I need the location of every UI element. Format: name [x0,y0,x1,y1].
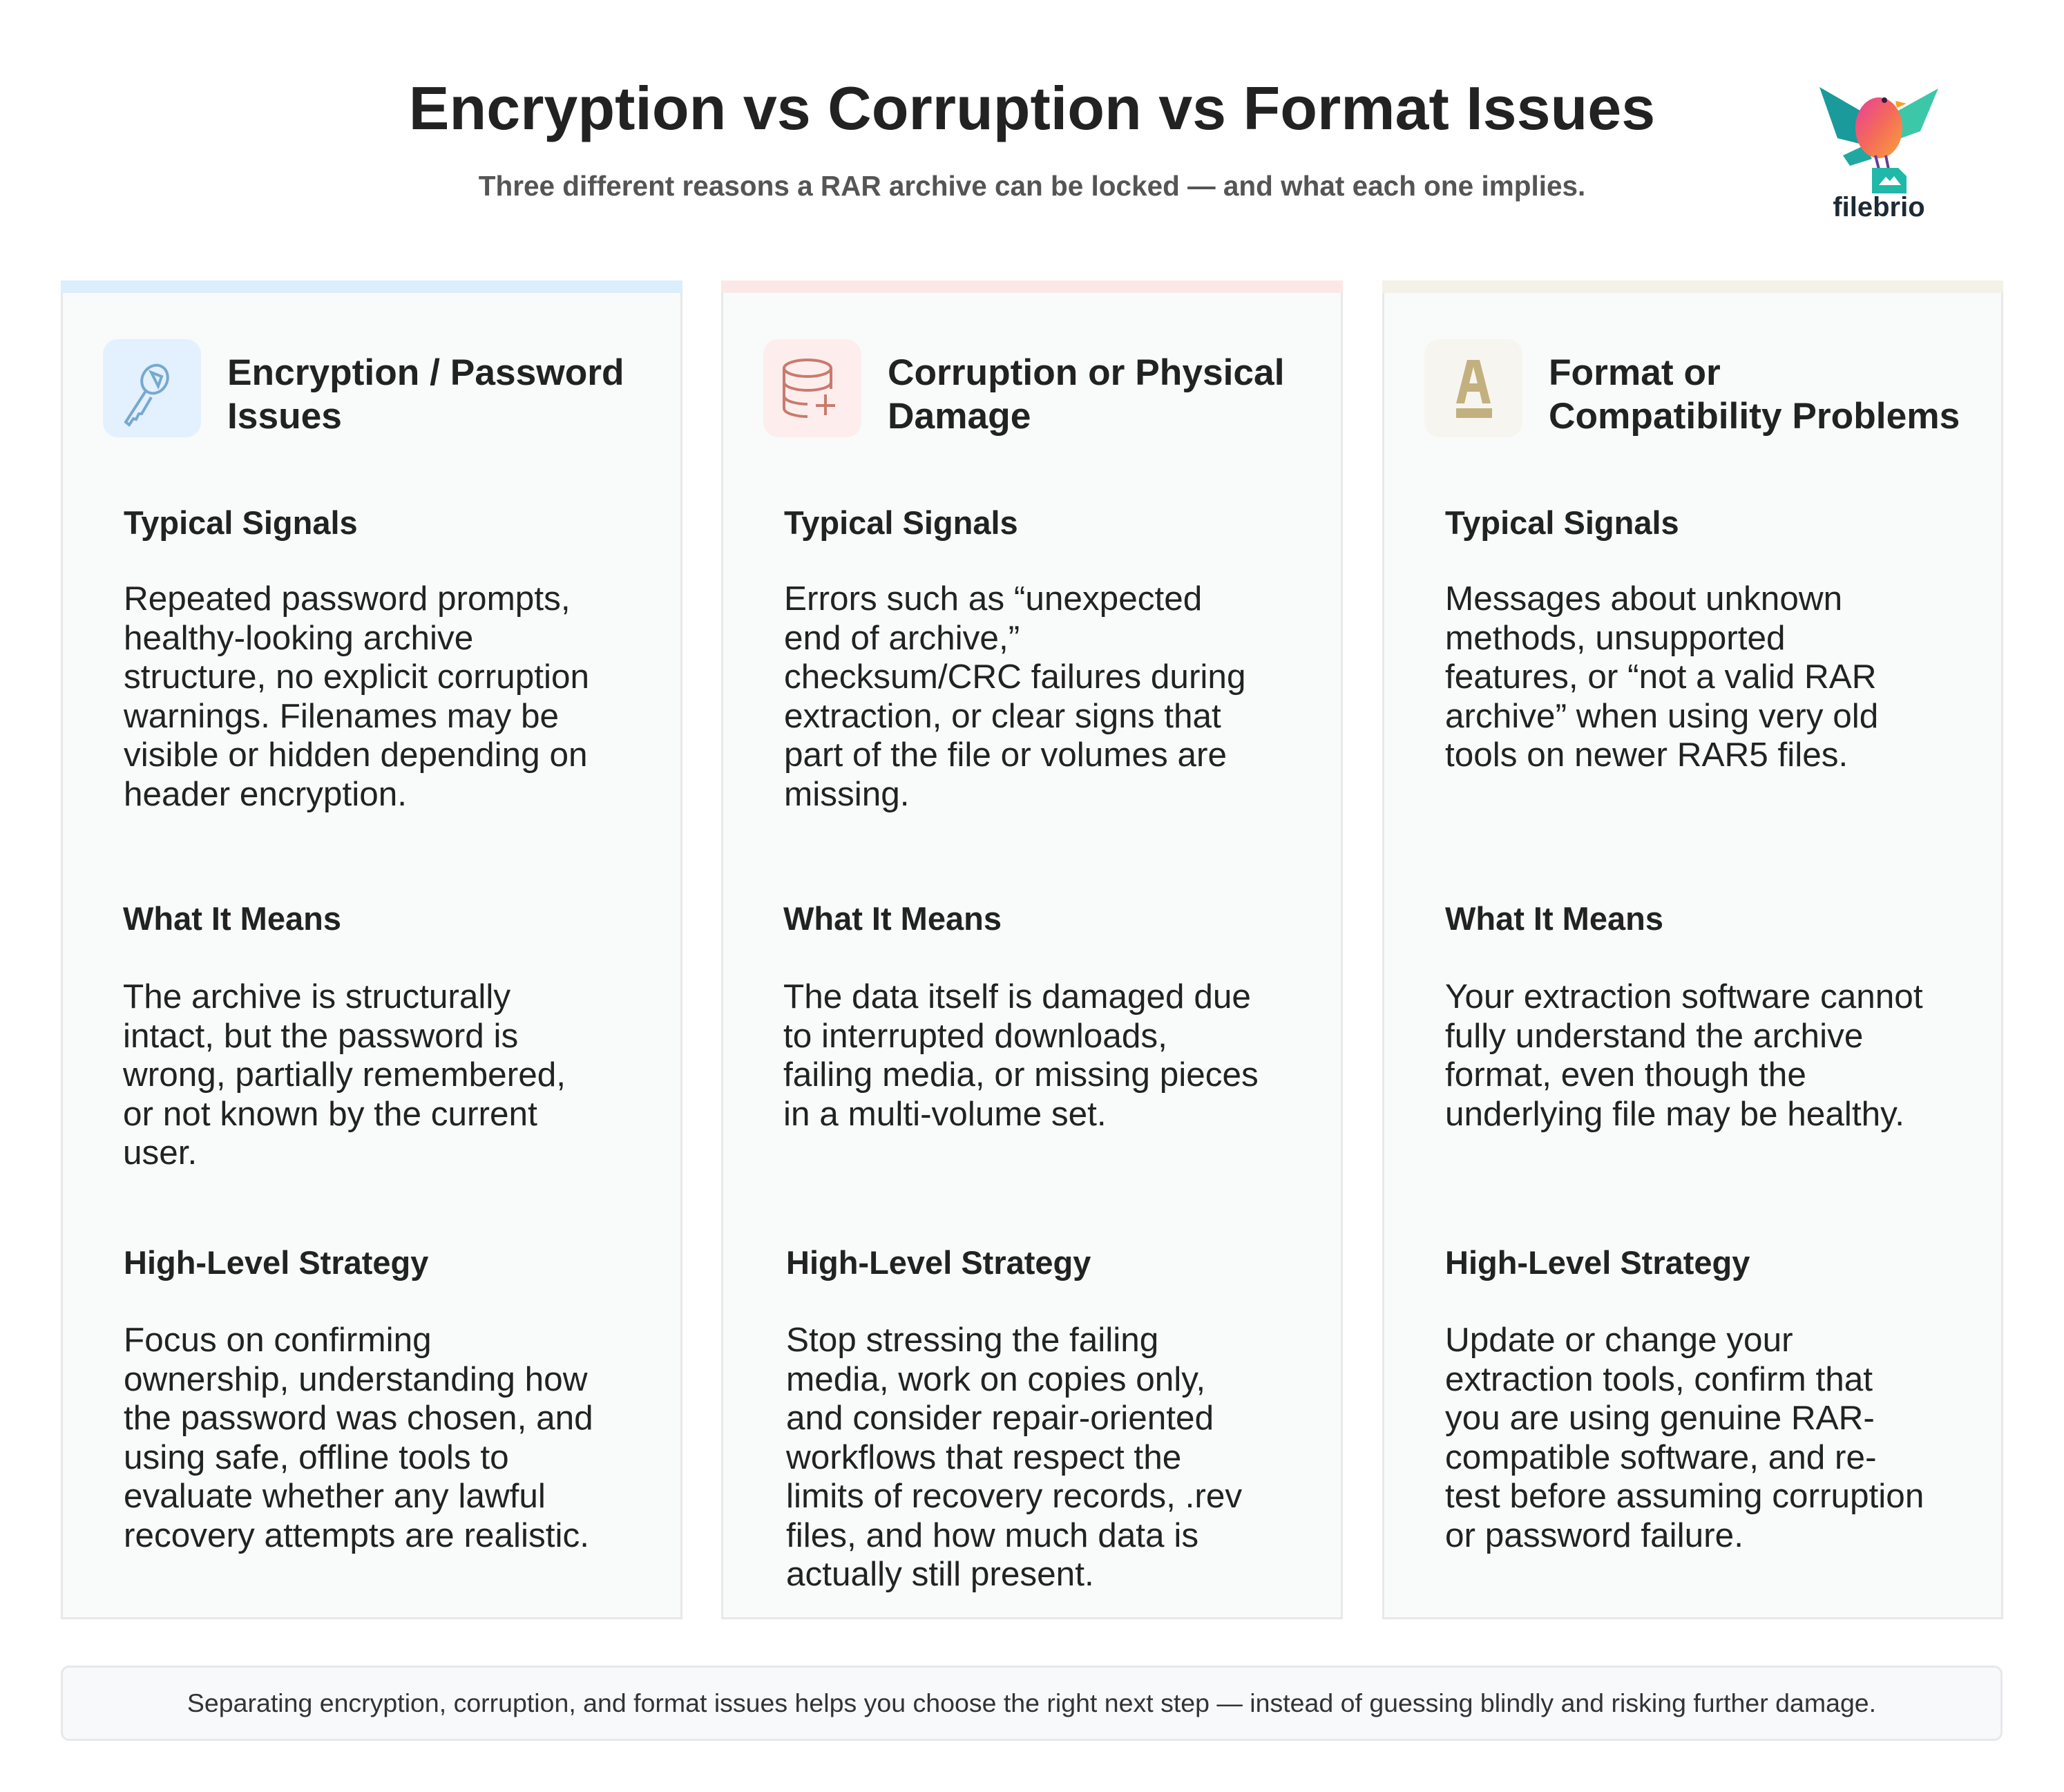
heading [1549,352,1960,437]
heading [888,352,1285,437]
text: The archive is structurally [123,978,510,1016]
subtitle: Three different reasons a RAR archive can be locked — and what each one implies. [479,170,1585,202]
text: compatible software, and re- [1445,1438,1877,1476]
text: workflows that respect the [786,1438,1181,1476]
footer note [61,1666,2003,1741]
text: intact, but the password is [123,1017,518,1054]
text: you are using genuine RAR- [1445,1399,1875,1437]
panel: format [1382,280,2003,1619]
text: healthy-looking archive [124,619,473,656]
text: Your extraction software cannot [1445,978,1923,1016]
text: recovery attempts are realistic. [124,1516,589,1554]
text: failing media, or missing pieces [783,1056,1259,1094]
text [124,1321,593,1554]
section: typical signals: Typical Signals [124,504,358,541]
text: part of the file or volumes are [784,736,1227,774]
heading: Format or [1549,352,1721,393]
text: end of archive,” [784,619,1020,656]
section: what it means: What It Means [1445,900,1663,937]
text [1445,1321,1924,1554]
section: strategy: High-Level Strategy [786,1244,1091,1281]
text [1445,978,1923,1133]
text: header encryption. [124,775,407,812]
text [124,580,589,812]
text: Repeated password prompts, [124,580,571,618]
text: ownership, understanding how [124,1360,587,1398]
text: tools on newer RAR5 files. [1445,736,1848,774]
text: using safe, offline tools to [124,1438,509,1476]
text: Messages about unknown [1445,580,1842,618]
heading: Damage [888,396,1031,437]
text: test before assuming corruption [1445,1477,1924,1515]
panel: corruption [721,280,1343,1619]
text: limits of recovery records, .rev [786,1477,1242,1515]
text: user. [123,1134,197,1172]
text: underlying file may be healthy. [1445,1094,1904,1133]
text: and consider repair-oriented [786,1399,1214,1437]
text: Update or change your [1445,1321,1793,1359]
text [123,978,566,1172]
heading: Issues [227,396,342,437]
section: strategy: High-Level Strategy [124,1244,428,1281]
section: what it means: What It Means [123,900,341,937]
text: evaluate whether any lawful [124,1477,546,1515]
heading [227,352,624,437]
logo: filebrio [1819,87,1938,222]
text: visible or hidden depending on [124,736,588,774]
text: Stop stressing the failing [786,1321,1158,1359]
icon: database [763,339,861,437]
text: in a multi-volume set. [783,1094,1107,1133]
section: strategy: High-Level Strategy [1445,1244,1750,1281]
text: structure, no explicit corruption [124,658,589,696]
text: extraction, or clear signs that [784,696,1221,735]
footer note: Separating encryption, corruption, and format issues helps you choose the right next step — instead of guessing blindly and risking further damage. [187,1688,1876,1717]
icon: key [103,339,201,437]
text: extraction tools, confirm that [1445,1360,1873,1398]
text: Focus on confirming [124,1321,432,1359]
text: The data itself is damaged due [783,978,1251,1016]
text: warnings. Filenames may be [124,696,559,735]
text: archive” when using very old [1445,696,1878,735]
text: methods, unsupported [1445,619,1786,656]
text: the password was chosen, and [124,1399,593,1437]
section: what it means: What It Means [783,900,1002,937]
text: actually still present. [786,1555,1094,1593]
text [786,1321,1242,1593]
heading: Compatibility Problems [1549,396,1960,437]
panel: encryption [61,280,682,1619]
text: wrong, partially remembered, [123,1056,566,1094]
text: or not known by the current [123,1094,537,1133]
text: checksum/CRC failures during [784,658,1246,696]
text [1445,580,1878,774]
text: format, even though the [1445,1056,1806,1094]
heading: Corruption or Physical [888,352,1285,393]
title: Encryption vs Corruption vs Format Issues [409,74,1655,142]
text [783,978,1259,1133]
text [784,580,1246,812]
heading: Encryption / Password [227,352,624,393]
text: media, work on copies only, [786,1360,1205,1398]
text: fully understand the archive [1445,1017,1863,1054]
text: missing. [784,775,910,812]
text: to interrupted downloads, [783,1017,1167,1054]
icon: letter A [1424,339,1522,437]
logo: filebrio: filebrio [1833,192,1925,222]
section: typical signals: Typical Signals [784,504,1018,541]
text: features, or “not a valid RAR [1445,658,1877,696]
text: Errors such as “unexpected [784,580,1202,618]
text: or password failure. [1445,1516,1743,1554]
section: typical signals: Typical Signals [1445,504,1679,541]
text: files, and how much data is [786,1516,1198,1554]
